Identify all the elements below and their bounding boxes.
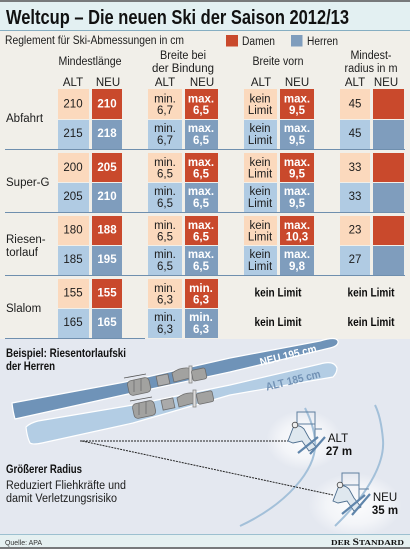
row: Riesentorlauf: min. xyxy=(154,220,176,232)
row: Riesentorlauf: Riesen- xyxy=(6,234,46,246)
row: Riesentorlauf: 6,5 xyxy=(157,261,173,273)
column headers: NEU xyxy=(285,77,309,89)
row: Abfahrt: 218 xyxy=(97,128,117,140)
row: Riesentorlauf: max. xyxy=(188,249,214,261)
row: Abfahrt: Limit xyxy=(248,105,273,117)
row: Riesentorlauf: 9,8 xyxy=(289,261,306,273)
row: Slalom: kein Limit xyxy=(254,288,302,300)
ski: NEU 195 cm xyxy=(12,338,338,419)
row: Slalom: 155 xyxy=(63,288,83,300)
column headers: der Bindung xyxy=(152,63,214,75)
text: larger radius: Reduziert Fliehkräfte und xyxy=(6,480,126,492)
example heading: der Herren xyxy=(6,361,55,373)
row: Abfahrt: 9,5 xyxy=(289,105,306,117)
row: Riesentorlauf: 180 xyxy=(63,224,83,236)
source: Quelle: APA xyxy=(5,538,42,547)
text: larger radius: damit Verletzungsrisiko xyxy=(6,493,117,505)
row: Riesentorlauf: kein xyxy=(249,249,271,261)
row: Slalom: kein Limit xyxy=(348,288,395,300)
row: Abfahrt: Abfahrt xyxy=(6,113,44,125)
row: Super-G: 6,5 xyxy=(157,198,173,210)
column headers: Breite bei xyxy=(160,50,206,62)
row: Abfahrt: min. xyxy=(154,123,176,135)
row: Slalom xyxy=(6,283,395,336)
row: Riesentorlauf: Limit xyxy=(248,232,273,244)
label: NEU 35 m xyxy=(372,492,398,517)
curve: NEU radius xyxy=(335,405,383,526)
row: Super-G: max. xyxy=(284,157,310,169)
row: Abfahrt: 6,5 xyxy=(193,135,210,147)
row: Super-G: 9,5 xyxy=(289,168,306,180)
curve: ALT radius xyxy=(240,408,315,526)
label: ALT 27 m: 27 m xyxy=(326,446,352,458)
bindings: ALT ski xyxy=(130,390,214,419)
row: Super-G: min. xyxy=(154,157,176,169)
row: Riesentorlauf: max. xyxy=(188,220,214,232)
column headers: radius in m xyxy=(344,63,398,75)
row: Slalom: 6,3 xyxy=(157,294,173,306)
row: Abfahrt: 215 xyxy=(63,128,83,140)
row: Riesentorlauf: 6,5 xyxy=(193,261,210,273)
row: Abfahrt: kein xyxy=(249,94,271,106)
row: Abfahrt: max. xyxy=(188,123,214,135)
row: Riesentorlauf: kein xyxy=(249,220,271,232)
title band: Weltcup – Die neuen Ski der Saison 2012/13 xyxy=(6,7,349,29)
table cell backgrounds xyxy=(5,89,405,339)
column headers: NEU xyxy=(374,77,398,89)
text: larger radius xyxy=(6,464,126,505)
row: Riesentorlauf: torlauf xyxy=(6,247,39,259)
row: Super-G: 33 xyxy=(349,162,361,174)
example heading xyxy=(6,348,126,373)
ski: ALT 185 cm: ALT 185 cm xyxy=(265,368,322,394)
skier: ALT xyxy=(288,412,325,454)
legend xyxy=(226,35,338,48)
row: Super-G xyxy=(6,157,361,210)
row: Riesentorlauf: 185 xyxy=(63,254,83,266)
row: Super-G: 6,5 xyxy=(193,198,210,210)
column headers: ALT xyxy=(345,77,365,89)
row: Super-G: 210 xyxy=(97,191,117,203)
text: larger radius: Größerer Radius xyxy=(6,464,82,476)
row: Super-G: kein xyxy=(249,186,271,198)
column headers: Mindest- xyxy=(350,50,392,62)
row: Riesentorlauf: 6,5 xyxy=(157,232,173,244)
label: ALT 27 m: ALT xyxy=(328,433,348,445)
row: Abfahrt: 6,5 xyxy=(193,105,210,117)
row: Super-G: max. xyxy=(188,186,214,198)
row: Super-G: 205 xyxy=(63,191,83,203)
row: Riesentorlauf xyxy=(6,220,361,273)
row: Slalom: min. xyxy=(189,283,213,295)
row: Abfahrt: 6,7 xyxy=(157,105,173,117)
column headers: ALT xyxy=(251,77,271,89)
row: Slalom: 6,3 xyxy=(157,324,173,336)
row: Riesentorlauf: 27 xyxy=(349,254,361,266)
row: Super-G: 33 xyxy=(349,191,361,203)
legend: Herren xyxy=(307,36,338,48)
row: Abfahrt: max. xyxy=(188,94,214,106)
row: Abfahrt: Limit xyxy=(248,135,273,147)
ski: ALT 185 cm xyxy=(26,363,337,444)
row: Abfahrt: min. xyxy=(154,94,176,106)
row: Riesentorlauf: max. xyxy=(284,249,310,261)
row: Super-G: 9,5 xyxy=(289,198,306,210)
top border xyxy=(0,0,410,2)
column headers: Breite vorn xyxy=(252,56,304,68)
bindings: NEU ski xyxy=(124,366,207,396)
legend: Damen xyxy=(242,36,275,48)
row: Abfahrt: 9,5 xyxy=(289,135,306,147)
row: Abfahrt: 45 xyxy=(349,128,361,140)
row: Abfahrt: max. xyxy=(284,94,310,106)
row: Riesentorlauf: min. xyxy=(154,249,176,261)
row: Riesentorlauf: 10,3 xyxy=(286,232,308,244)
row: Abfahrt: max. xyxy=(284,123,310,135)
column headers: ALT xyxy=(63,77,83,89)
label: NEU 35 m: 35 m xyxy=(372,505,398,517)
row: Slalom: Slalom xyxy=(6,303,41,315)
row: Slalom: 155 xyxy=(97,288,117,300)
column headers: NEU xyxy=(96,77,120,89)
subtitle: Reglement für Ski-Abmessungen in cm xyxy=(5,33,184,47)
row: Super-G: 6,5 xyxy=(193,168,210,180)
row: Riesentorlauf: 23 xyxy=(349,224,361,236)
row: Riesentorlauf: 195 xyxy=(97,254,117,266)
label: ALT 27 m xyxy=(326,433,352,458)
row: Slalom: 6,3 xyxy=(193,294,209,306)
glow: NEU radius xyxy=(308,473,402,537)
row: Slalom: kein Limit xyxy=(348,317,395,329)
row: Slalom: min. xyxy=(154,283,176,295)
row: Abfahrt: 210 xyxy=(97,98,117,110)
row: Slalom: 165 xyxy=(97,317,117,329)
row: Abfahrt: 45 xyxy=(349,98,361,110)
footer band xyxy=(0,534,410,549)
row: Super-G: min. xyxy=(154,186,176,198)
column headers: Mindestlänge xyxy=(58,56,122,68)
label: NEU 35 m: NEU xyxy=(373,492,397,504)
row: Super-G: 6,5 xyxy=(157,168,173,180)
skier: NEU xyxy=(333,473,370,515)
column headers xyxy=(58,50,398,89)
example panel background xyxy=(0,339,410,535)
column headers: NEU xyxy=(190,77,214,89)
row: Abfahrt: 210 xyxy=(63,98,83,110)
row: Super-G: Limit xyxy=(248,198,273,210)
row: Riesentorlauf: 188 xyxy=(97,224,117,236)
row: Slalom: 165 xyxy=(63,317,83,329)
row: Super-G: 200 xyxy=(63,162,83,174)
row: Slalom: min. xyxy=(189,312,213,324)
row: Super-G: Super-G xyxy=(6,177,50,189)
row: Riesentorlauf: max. xyxy=(284,220,310,232)
example heading: Beispiel: Riesentorlaufski xyxy=(6,348,126,360)
ski: NEU 195 cm: NEU 195 cm xyxy=(259,343,318,369)
row: Abfahrt: kein xyxy=(249,123,271,135)
row: Super-G: 205 xyxy=(97,162,117,174)
row: Slalom: 6,3 xyxy=(193,324,209,336)
row: Abfahrt: 6,7 xyxy=(157,135,173,147)
dotted lines xyxy=(80,441,333,495)
row: Riesentorlauf: 6,5 xyxy=(193,232,210,244)
row: Riesentorlauf: Limit xyxy=(248,261,273,273)
logo: Der Standard: DER STANDARD xyxy=(331,538,405,548)
row: Slalom: kein Limit xyxy=(254,317,302,329)
glow: ALT radius xyxy=(266,410,342,470)
row: Abfahrt xyxy=(6,94,361,147)
row: Super-G: max. xyxy=(284,186,310,198)
column headers: ALT xyxy=(155,77,175,89)
row: Slalom: min. xyxy=(154,312,176,324)
row: Super-G: kein xyxy=(249,157,271,169)
row: Super-G: Limit xyxy=(248,168,273,180)
row: Super-G: max. xyxy=(188,157,214,169)
